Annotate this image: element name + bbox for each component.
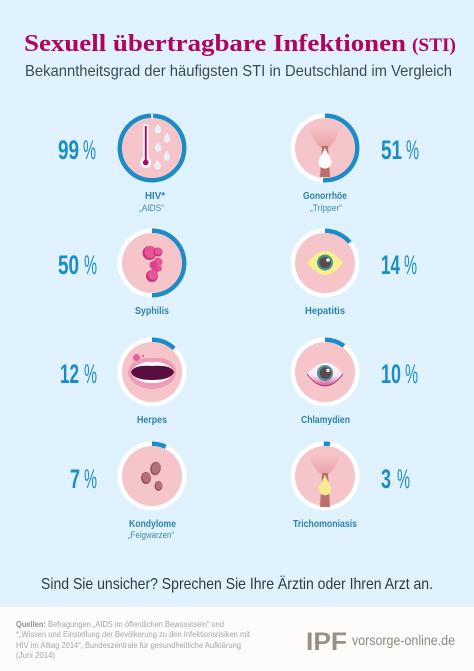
percentage: 12 %: % (84, 359, 97, 389)
icon: yellow eye (307, 251, 343, 275)
sources text: HIV im Alltag 2014“, Bundeszentrale für gesundheitliche Aufklärung (16, 641, 241, 650)
percentage: 3 %: % (397, 464, 410, 494)
percentage: 7 %: % (84, 464, 97, 494)
label: Kondylome: „Feigwarzen“ (128, 530, 174, 541)
percentage: 99 %: 99 (58, 135, 79, 165)
icon: red inflamed eye (307, 363, 343, 386)
sources text: (Juni 2014) (16, 651, 55, 660)
label: Hepatitis: Hepatitis (305, 306, 345, 317)
sources text: *„Wissen und Einstellung der Bevölkerung zu den Infektionsrisiken mit (16, 630, 251, 639)
percentage: 10 %: % (405, 359, 418, 389)
website: vorsorge-online.de (352, 633, 455, 648)
percentage: 51 %: % (406, 135, 419, 165)
percentage: 14 %: 14 (381, 250, 400, 280)
ring chart: 51 percent (290, 114, 360, 182)
percentage: 51 %: 51 (381, 135, 402, 165)
logo: IPF: IPF (306, 628, 347, 656)
percentage: 7 % (70, 464, 97, 494)
panel: HIV (58, 114, 186, 214)
ring chart: 50 percent (118, 228, 186, 298)
label: HIV (139, 191, 165, 214)
percentage: 99 %: % (83, 135, 96, 165)
title: (STI) (412, 35, 456, 56)
percentage: 3 %: 3 (381, 464, 391, 494)
title: Sexuell übertragbare Infektionen (24, 31, 406, 57)
ring chart: 14 percent (290, 228, 360, 298)
panel: Gonorrhöe (290, 114, 419, 214)
percentage: 3 % (381, 464, 410, 494)
label: Trichomoniasis: Trichomoniasis (293, 519, 357, 530)
percentage: 12 %: 12 (60, 359, 79, 389)
icon: genital warts (141, 461, 162, 491)
ring chart: 3 percent (290, 442, 360, 510)
ring chart: 10 percent (290, 338, 360, 406)
percentage: 7 %: 7 (70, 464, 80, 494)
label: Gonorrhöe: „Tripper“ (310, 203, 342, 214)
icon: discharge white (310, 125, 339, 177)
panel: Herpes (60, 338, 186, 426)
panel: Trichomoniasis (290, 442, 410, 530)
ring chart: 99 percent (118, 114, 186, 182)
icon: yellow discharge (310, 453, 339, 507)
sources text: Quellen: Befragungen „AIDS im öffentlichen Bewusstsein“ und (16, 620, 224, 629)
panel: Chlamydien (290, 338, 418, 426)
ring chart: 12 percent (118, 338, 186, 406)
label: Kondylome (128, 519, 176, 541)
panel: Syphilis (58, 228, 186, 317)
label: Herpes: Herpes (137, 415, 167, 426)
panel: Kondylome (70, 442, 186, 541)
percentage: 10 %: 10 (381, 359, 401, 389)
label: HIV: „AIDS“ (139, 203, 164, 214)
label: Kondylome: Kondylome (129, 519, 176, 530)
label: Gonorrhöe (303, 191, 347, 214)
subtitle: Bekanntheitsgrad der häufigsten STI in Deutschland im Vergleich (25, 63, 452, 80)
icon: mouth with herpes blister (128, 354, 176, 389)
percentage: 50 %: % (84, 250, 97, 280)
sources text (16, 620, 251, 660)
ring chart: 7 percent (118, 442, 186, 510)
percentage: 14 %: % (404, 250, 417, 280)
percentage: 50 %: 50 (58, 250, 79, 280)
label: Chlamydien: Chlamydien (301, 415, 350, 426)
label: Syphilis: Syphilis (135, 306, 169, 317)
panel: Hepatitis (290, 228, 417, 317)
label: HIV: HIV* (145, 191, 165, 202)
icon: thermometer and sweat drops (140, 124, 170, 170)
icon: syphilis sores (142, 246, 162, 282)
label: Gonorrhöe: Gonorrhöe (303, 191, 347, 202)
